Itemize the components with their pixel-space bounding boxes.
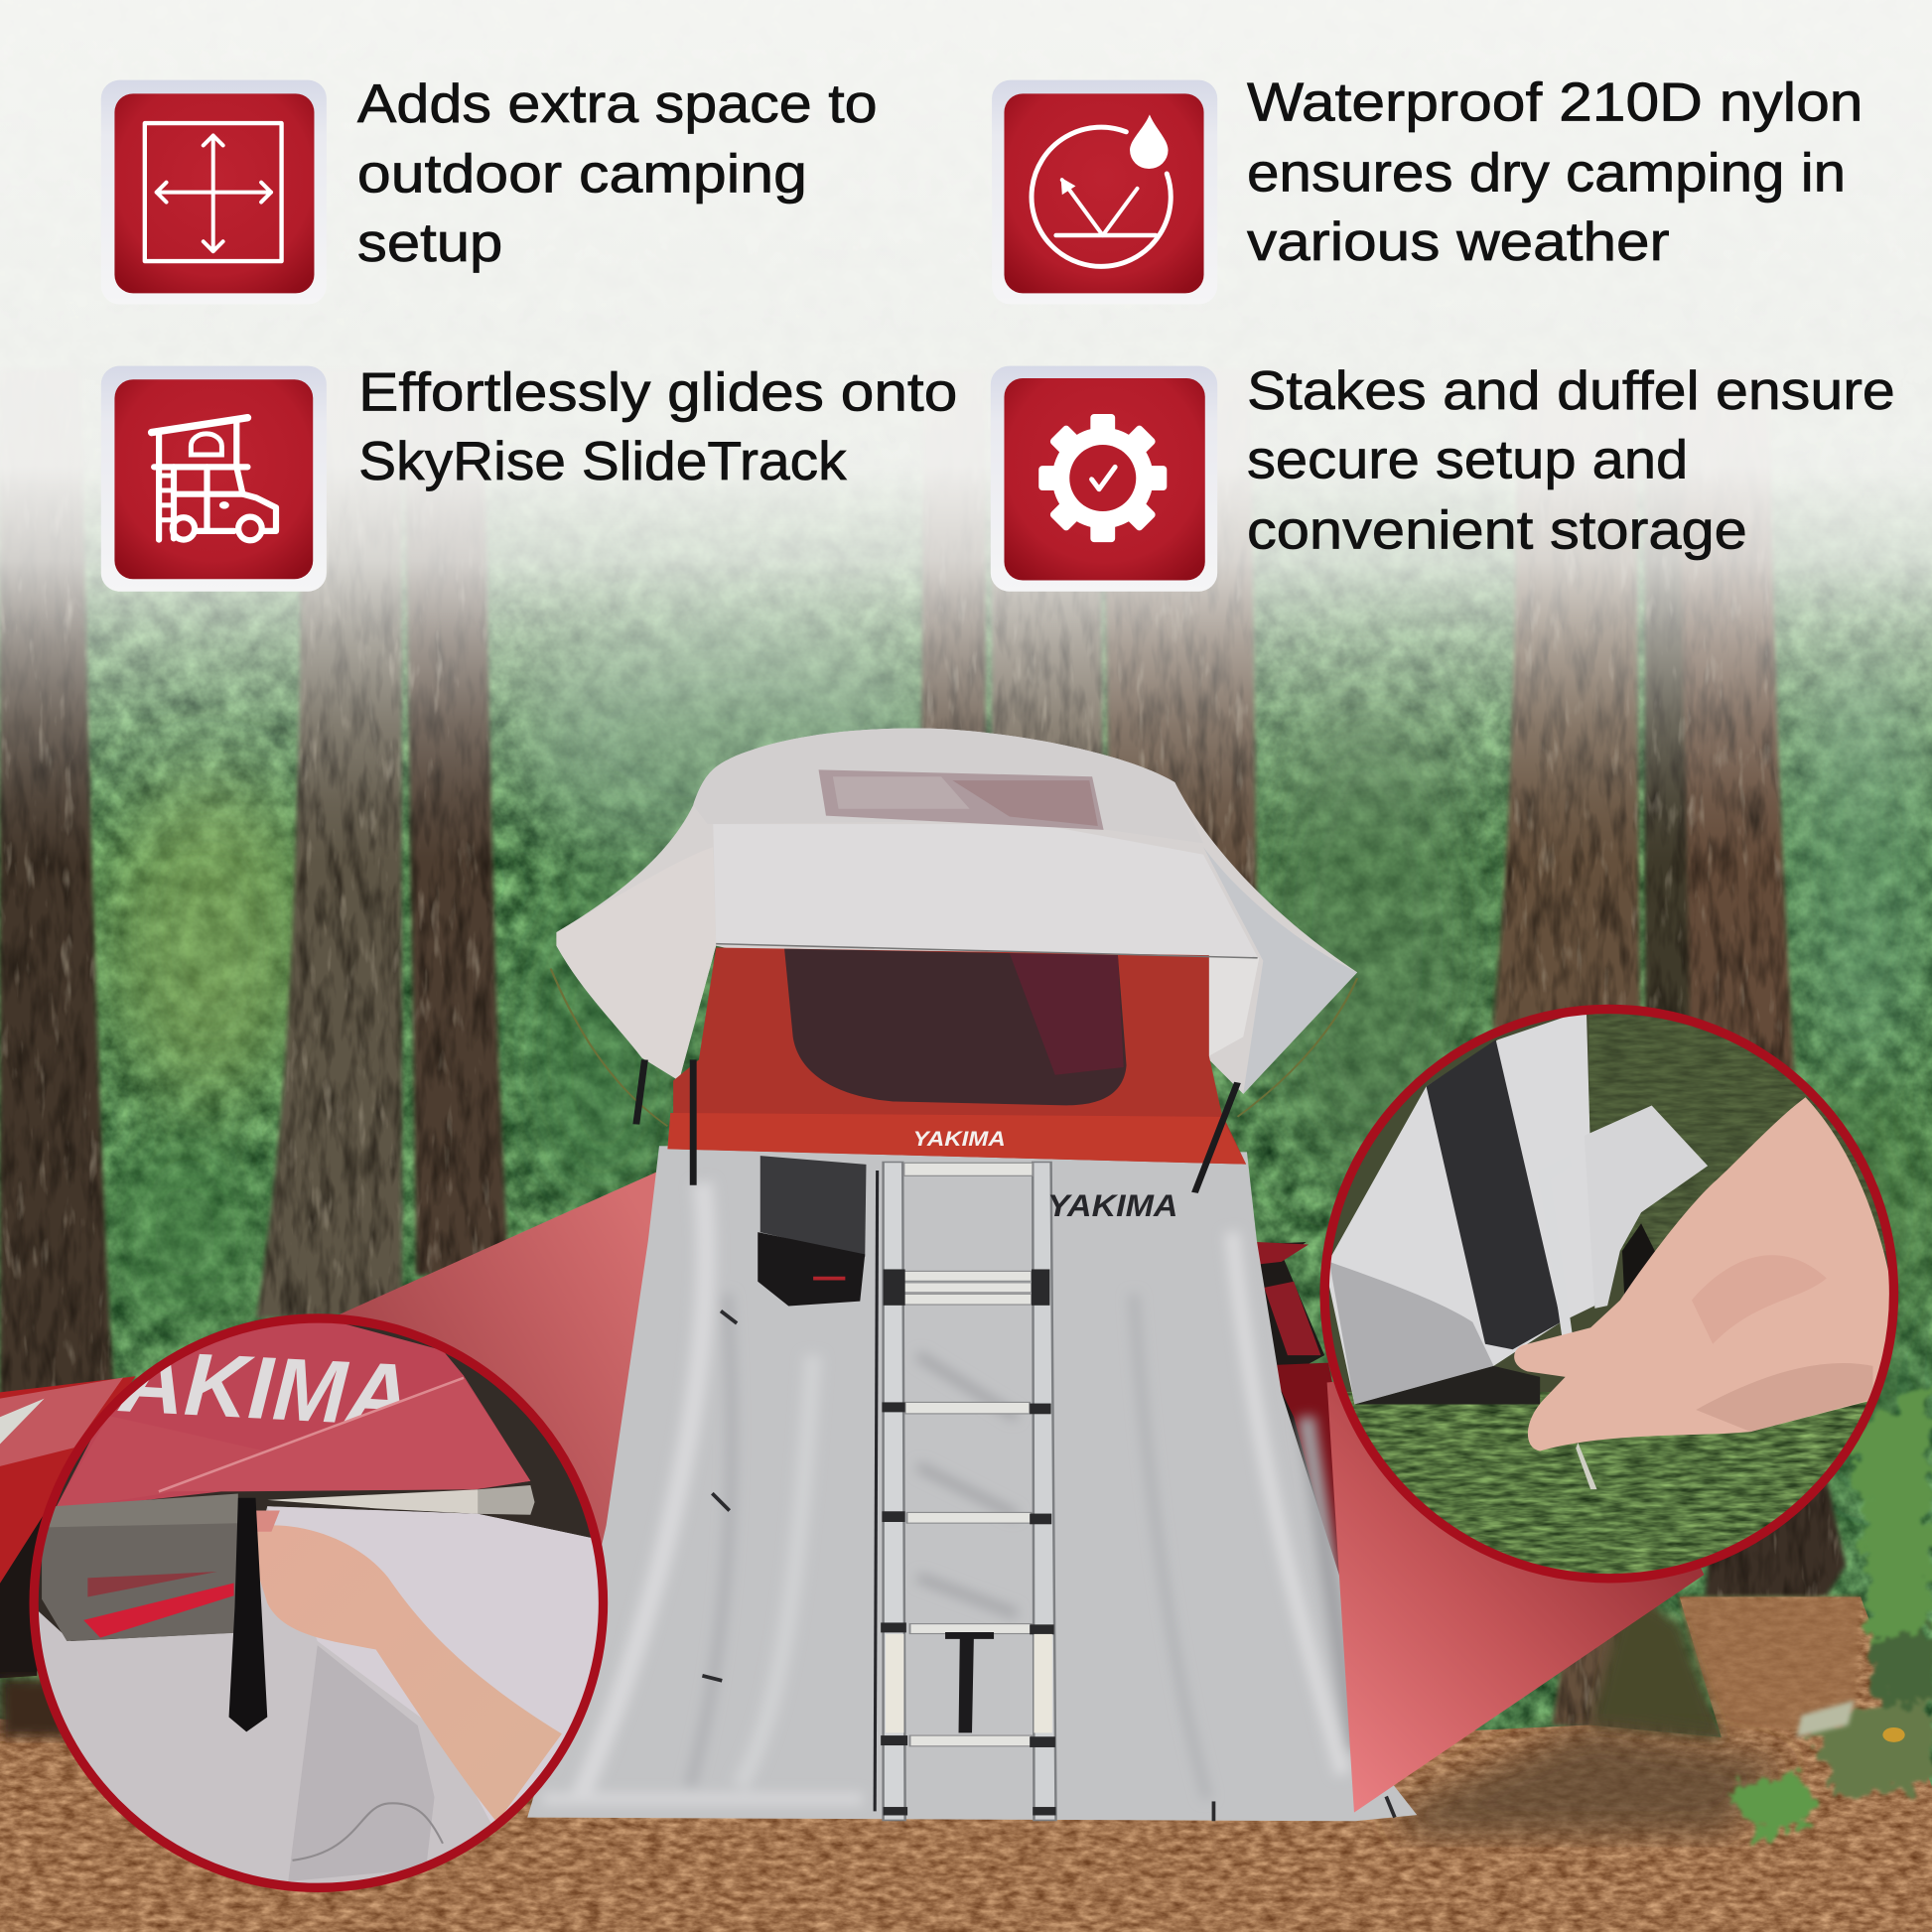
fabric corner (1585, 1106, 1708, 1309)
text: slide track (358, 361, 957, 491)
feature: extra space (101, 73, 878, 305)
rooftop tent (527, 729, 1417, 1821)
right-side undergrowth (1725, 1380, 1932, 1836)
icon: gear with check mark (991, 366, 1217, 592)
ground (0, 1578, 1932, 1932)
parked red vehicle, right (1257, 1242, 1343, 1589)
red tent cover (55, 1316, 530, 1510)
icon: water drop and repel arrows (992, 80, 1217, 305)
icon: vehicle with rooftop tent (101, 366, 327, 592)
text: slide track: Effortlessly glides onto (358, 361, 957, 422)
text: waterproof (1247, 72, 1863, 272)
text: stakes and duffel: secure setup and (1247, 430, 1688, 490)
parked red vehicle, left (0, 1376, 136, 1737)
telescopic ladder (881, 1163, 1056, 1820)
feature: slide track (101, 361, 957, 592)
tree trunks (0, 369, 1846, 1737)
text: waterproof: various weather (1247, 211, 1670, 272)
YAKIMA logo, skirt: YAKIMA (1047, 1188, 1177, 1223)
text: extra space: outdoor camping (357, 144, 807, 205)
text: waterproof: ensures dry camping in (1247, 142, 1846, 203)
right callout wedge (1327, 1355, 1704, 1813)
white annex fabric (1325, 1010, 1594, 1405)
circle ring, left (34, 1318, 604, 1887)
hand and arm (250, 1525, 562, 1823)
rainfly and tent body (551, 729, 1357, 1192)
YAKIMA logo, tent band: YAKIMA (913, 1128, 1006, 1151)
text: stakes and duffel: Stakes and duffel ensure (1247, 360, 1895, 421)
inner mesh window (42, 1498, 238, 1641)
tie-off loops (702, 1311, 1395, 1821)
text: waterproof: Waterproof 210D nylon (1247, 72, 1863, 133)
metal tent stake (1538, 1155, 1578, 1374)
text: extra space (357, 73, 878, 273)
YAKIMA logo on red cover: YAKIMA (66, 1328, 413, 1445)
black webbing strap (1427, 1039, 1561, 1349)
circle ring, right (1324, 1009, 1894, 1579)
feature: stakes and duffel (991, 360, 1895, 592)
hand (1514, 1097, 1894, 1450)
feature: waterproof (992, 72, 1863, 305)
text: slide track: SkyRise SlideTrack (358, 431, 847, 491)
text: stakes and duffel: convenient storage (1247, 499, 1747, 560)
icon: expand arrows (101, 80, 327, 305)
skirt fabric folds (542, 1182, 1355, 1799)
annex skirt (527, 1146, 1417, 1821)
text: extra space: setup (357, 212, 502, 273)
black strap (229, 1498, 267, 1731)
text: extra space: Adds extra space to (357, 73, 878, 134)
detail circle: pulling annex over tent (25, 1307, 617, 1902)
tent door zipper (875, 1171, 878, 1811)
gray annex fabric (38, 1506, 591, 1883)
text: stakes and duffel (1247, 360, 1895, 560)
fog overlay (0, 0, 1932, 863)
storage bag (758, 1156, 866, 1307)
left callout wedge (328, 1169, 665, 1639)
detail circle: staking into the ground (1318, 1004, 1910, 1589)
